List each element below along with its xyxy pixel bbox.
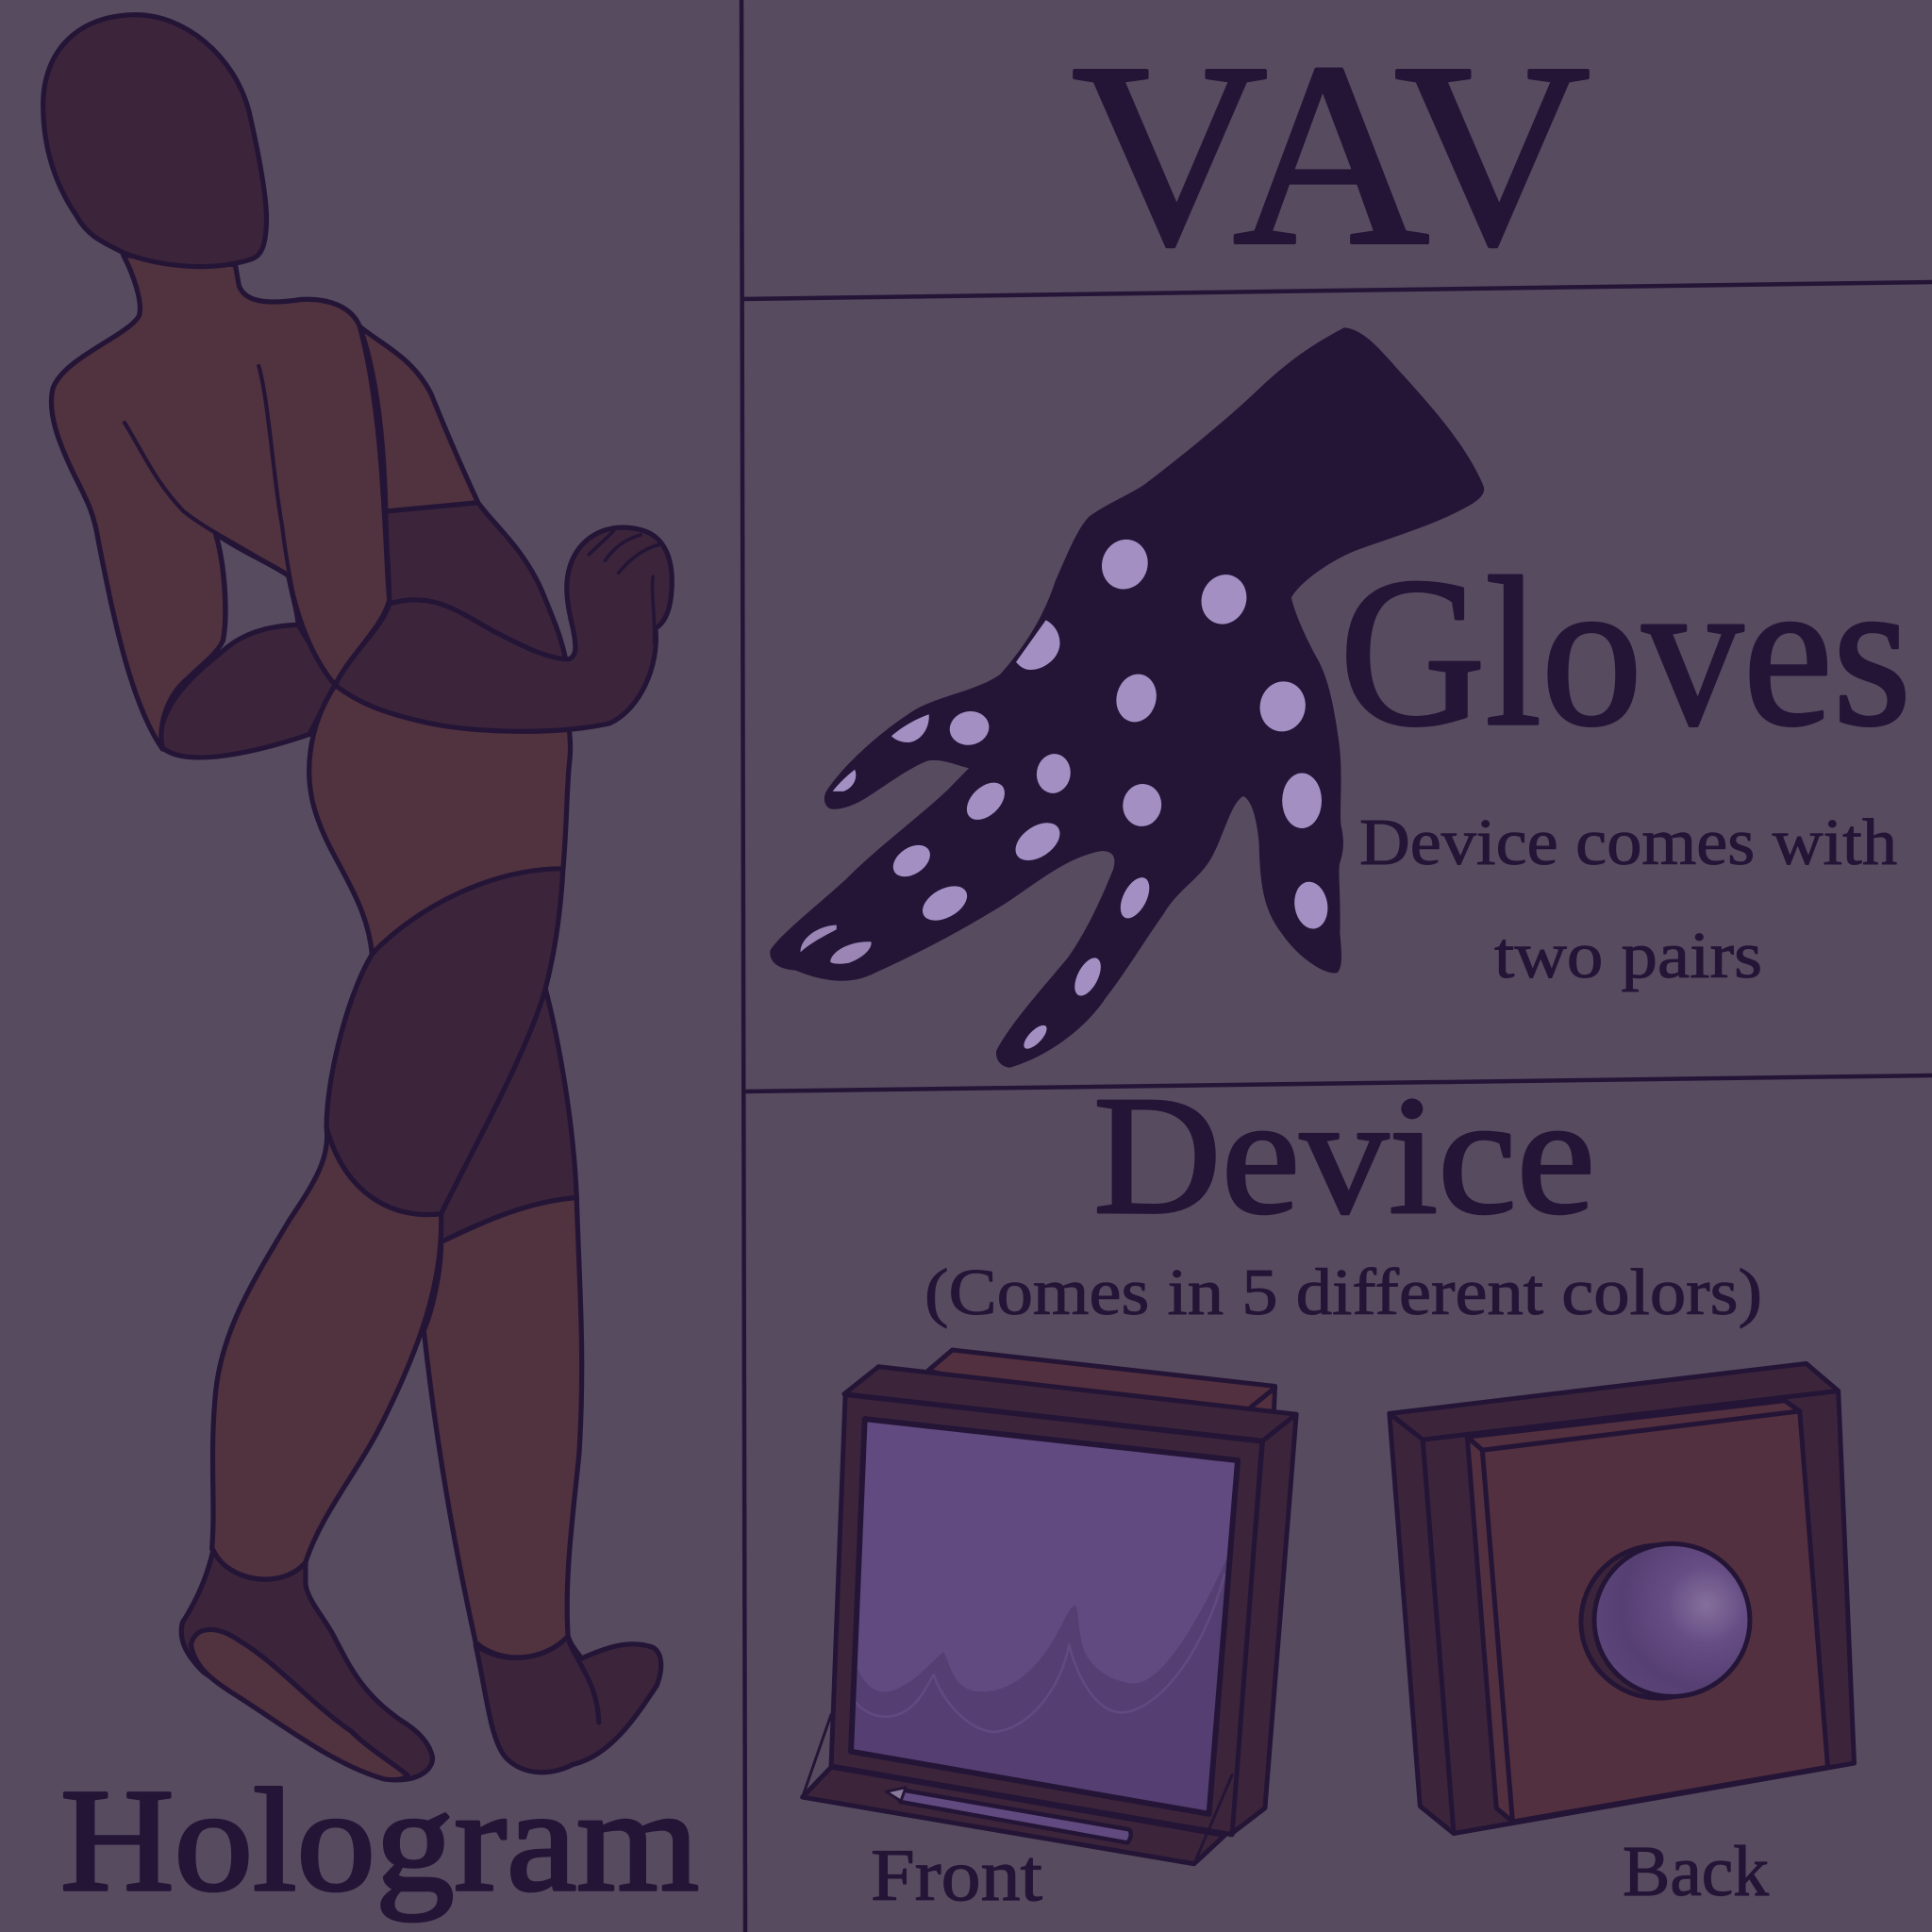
- text: gloves note: two pairs: [1494, 920, 1762, 992]
- back lower leg: [424, 1198, 582, 1657]
- front thigh: [326, 869, 563, 1214]
- front lower leg: [212, 1127, 441, 1579]
- fist lines: [589, 531, 659, 643]
- text: device colors: (Comes in 5 different colors): [924, 1257, 1762, 1329]
- figure: hologram mannequin: [43, 15, 672, 1780]
- icon: glove: [770, 327, 1484, 1068]
- text: gloves note: [1359, 807, 1897, 992]
- front foot sole: [191, 1629, 408, 1780]
- label: front: Front: [871, 1834, 1042, 1916]
- icon: device front: [803, 1350, 1296, 1864]
- screen: [848, 1419, 1238, 1816]
- back foot: [475, 1637, 661, 1773]
- title: VAV: [1072, 9, 1591, 300]
- head: [43, 15, 267, 267]
- abdomen: [309, 685, 571, 955]
- front arm with fist: [335, 527, 672, 731]
- back thigh: [441, 986, 576, 1242]
- front foot: [181, 1550, 433, 1780]
- back lines: [125, 366, 298, 626]
- gap between arm and torso: [218, 537, 297, 643]
- torso and left arm: [51, 255, 390, 749]
- heading: gloves: Gloves: [1340, 534, 1911, 770]
- label: back: Back: [1623, 1832, 1769, 1911]
- text: gloves note: Device comes with: [1359, 807, 1897, 879]
- left forearm: [160, 625, 335, 758]
- stylus: [886, 1788, 1131, 1842]
- back arm sleeve: [386, 503, 566, 659]
- heading: hologram: Hologram: [60, 1758, 699, 1922]
- orb: [1581, 1543, 1750, 1698]
- icon: device back: [1390, 1363, 1854, 1833]
- heading: device: Device: [1093, 1061, 1595, 1249]
- back upper arm: [359, 326, 478, 511]
